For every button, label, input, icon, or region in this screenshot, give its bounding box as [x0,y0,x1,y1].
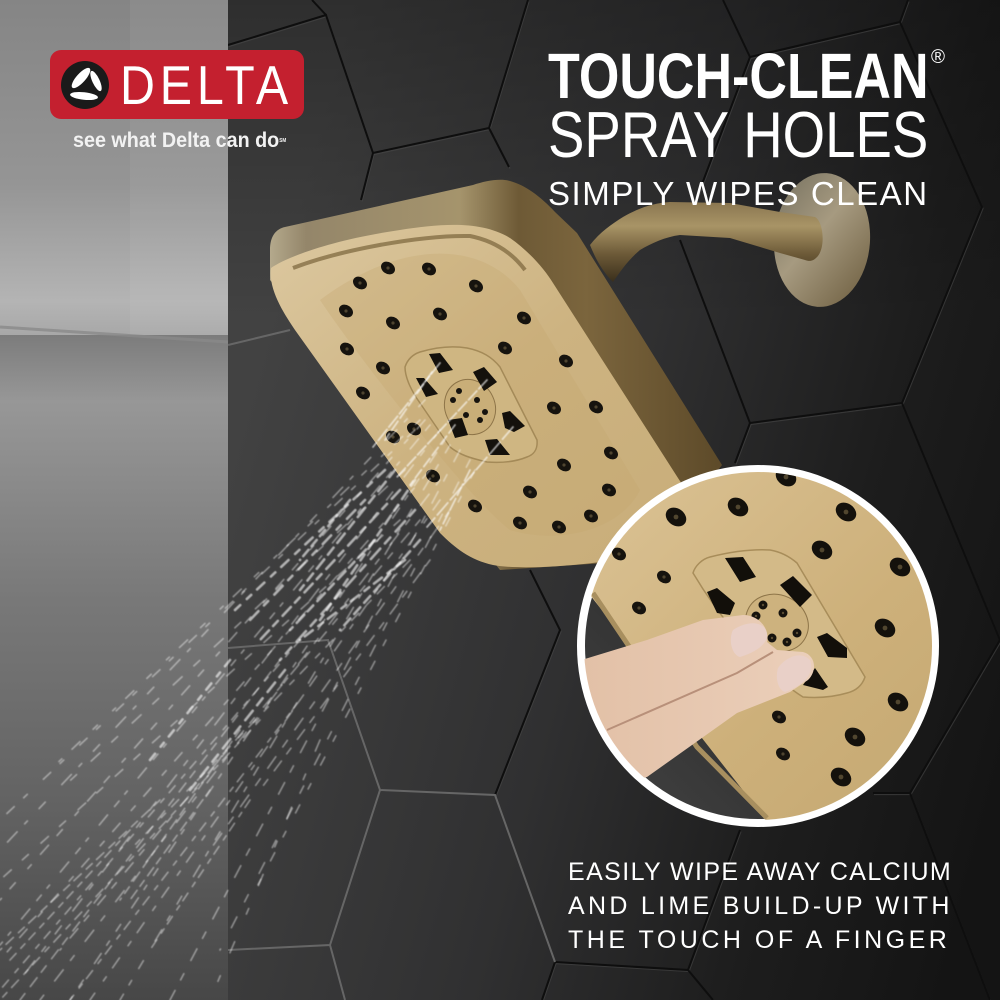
Delta logo [50,50,304,119]
logo wordmark: DELTA [120,54,293,116]
fingers [584,615,814,778]
spray holes [337,259,620,536]
caption text [568,858,953,954]
center spray cluster [405,347,537,462]
title line 2: SPRAY HOLES [548,98,928,171]
registered mark: ® [931,47,945,68]
caption text: EASILY WIPE AWAY CALCIUM [568,858,952,886]
caption text: AND LIME BUILD-UP WITH [568,892,953,920]
logo tagline: see what Delta can doSM [73,129,286,152]
title line 3: SIMPLY WIPES CLEAN [548,175,929,212]
caption text: THE TOUCH OF A FINGER [568,926,950,954]
gray side wall [0,0,228,1000]
shower arm and flange [590,170,875,310]
close-up circle inset [565,460,950,830]
dark hexagon tile wall [228,0,1000,1000]
water spray [0,363,513,1000]
title line 1: TOUCH-CLEAN [548,40,929,112]
logo emblem [61,61,109,109]
shower head [270,180,722,570]
title [548,40,945,212]
